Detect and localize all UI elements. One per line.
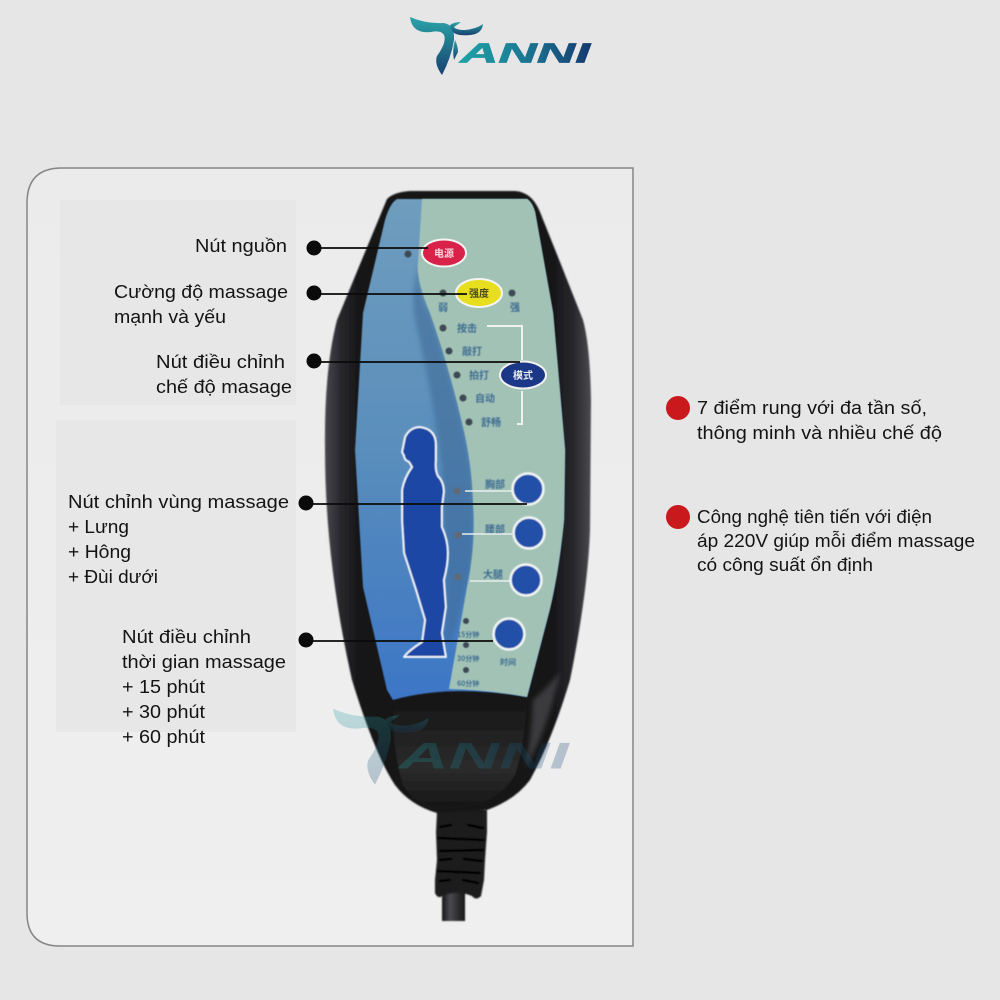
callout: timer: thời gian massage (122, 651, 286, 672)
callout: timer (122, 626, 493, 747)
panel captions: 胸部 (485, 476, 505, 491)
callout: mode: Nút điều chỉnh (156, 351, 285, 372)
logo wordmark: ANNI (458, 38, 592, 68)
panel captions: 30分钟 (457, 654, 479, 664)
callout: power button (195, 235, 428, 256)
panel captions: 舒畅 (481, 414, 501, 429)
feature: vibration points: 7 điểm rung với đa tần số, (697, 397, 927, 418)
panel captions: 敲打 (462, 343, 482, 358)
mode button (500, 362, 546, 388)
green panel (418, 199, 565, 697)
callout: intensity (114, 281, 467, 327)
callout: massage zones: + Đùi dưới (68, 566, 158, 587)
callout: timer: + 15 phút (122, 676, 205, 697)
remote control photo (325, 191, 591, 921)
panel captions: 弱 (438, 299, 448, 314)
darker blue band (413, 262, 474, 640)
callout: mode: chế độ masage (156, 376, 292, 397)
callout: timer: + 60 phút (122, 726, 205, 747)
mode button: 模式 (513, 367, 533, 382)
logo (410, 17, 592, 75)
feature: 220V technology (666, 505, 975, 575)
feature: 220V technology: áp 220V giúp mỗi điểm massage (697, 530, 975, 551)
power button: 电源 (434, 245, 454, 260)
panel captions: 大腿 (483, 566, 503, 581)
callout: intensity: Cường độ massage (114, 281, 288, 302)
callout: intensity: mạnh và yếu (114, 306, 226, 327)
callout: timer: Nút điều chỉnh (122, 626, 251, 647)
remote shell (325, 191, 591, 813)
intensity button (456, 279, 502, 307)
intensity button: 强度 (469, 285, 489, 300)
power button (422, 240, 466, 266)
panel captions: 腰部 (485, 521, 505, 536)
watermark logo (333, 709, 570, 785)
strain relief collar (435, 807, 487, 898)
callout: mode (156, 351, 520, 397)
feature: vibration points (666, 396, 942, 443)
body silhouette (402, 427, 448, 657)
callout: timer: + 30 phút (122, 701, 205, 722)
logo mark (410, 17, 483, 75)
cable (442, 880, 465, 921)
panel captions: 强 (510, 299, 520, 314)
callout: massage zones (68, 491, 527, 587)
feature: 220V technology: có công suất ổn định (697, 554, 873, 575)
callout: power button: Nút nguồn (195, 235, 287, 256)
panel captions: 15分钟 (457, 630, 479, 640)
panel captions: 自动 (475, 390, 495, 405)
panel captions: 按击 (457, 320, 477, 335)
panel captions: 拍打 (469, 367, 489, 382)
callout: massage zones: Nút chỉnh vùng massage (68, 491, 289, 512)
mode bracket (487, 326, 522, 424)
callout: massage zones: + Lưng (68, 516, 129, 537)
panel captions: 60分钟 (457, 679, 479, 689)
panel captions: 时间 (500, 657, 516, 668)
shell highlight (525, 672, 560, 768)
frame outline (27, 168, 633, 946)
watermark logo: ANNI (397, 735, 570, 776)
zone connector lines (462, 491, 512, 581)
callout: massage zones: + Hông (68, 541, 131, 562)
lower cup (393, 691, 527, 810)
photo backdrop inside frame (27, 168, 633, 946)
indicator lights (404, 250, 516, 673)
panel captions (438, 299, 520, 689)
massage zone buttons (494, 474, 544, 650)
feature: 220V technology: Công nghệ tiên tiến với điện (697, 506, 932, 527)
feature: vibration points: thông minh và nhiều chế độ (697, 422, 942, 443)
blue panel (355, 199, 565, 700)
